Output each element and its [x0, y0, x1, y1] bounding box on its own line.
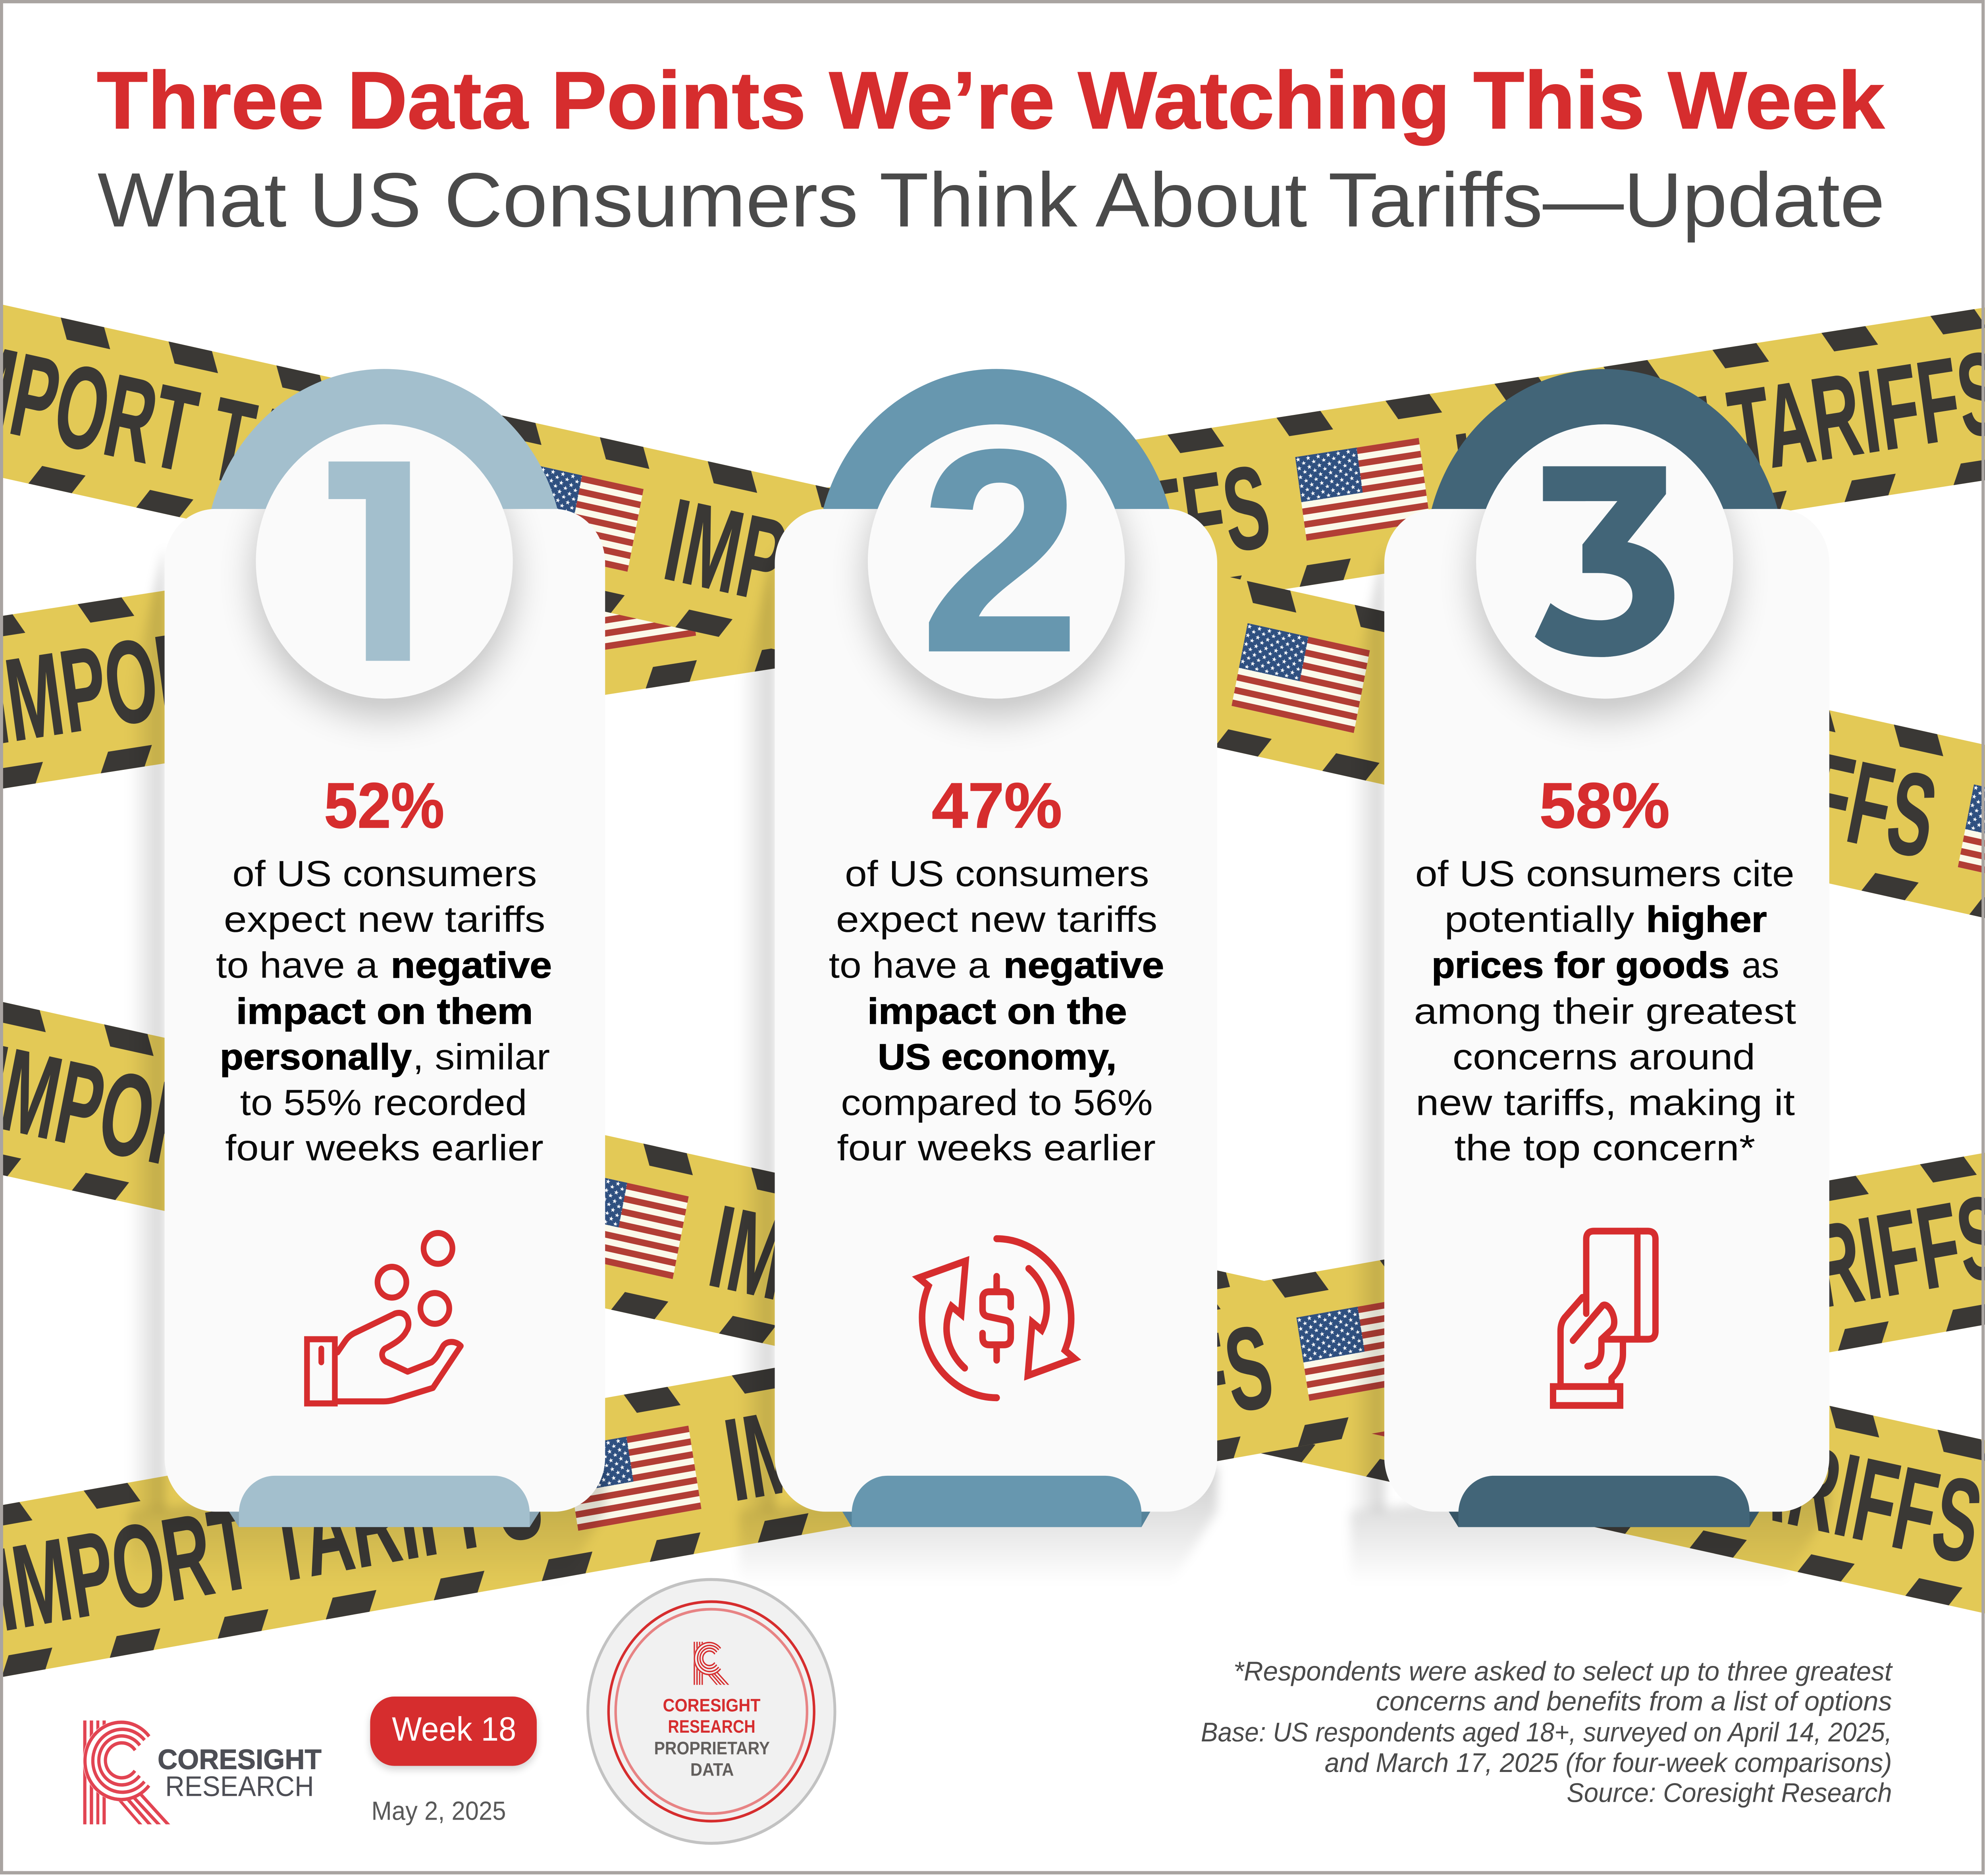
number circle shadow 3 [1474, 438, 1735, 716]
body text 1: four weeks earlier [225, 1128, 543, 1168]
number circle 2 [868, 424, 1125, 699]
arch 2 [817, 369, 1176, 595]
body text 2: compared to 56% [841, 1083, 1153, 1123]
body text 2: US economy, [878, 1037, 1116, 1078]
card body 1 [165, 509, 605, 1512]
panel: card 3 [1351, 369, 1829, 1584]
subtitle: What US Consumers Think About Tariffs—Update [98, 158, 1885, 244]
body text 3: the top concern* [1454, 1128, 1756, 1168]
body text 3: new tariffs, making it [1416, 1083, 1796, 1123]
icon: dollar with circular arrows [919, 1239, 1075, 1398]
body text 3: higher [1646, 899, 1767, 940]
body text 1: , similar [413, 1037, 550, 1078]
body text 2: to have a [829, 945, 991, 986]
footnote: Base: US respondents aged 18+, surveyed on April 14, 2025, [1201, 1718, 1892, 1748]
bottom tab 1 [239, 1476, 530, 1527]
body text 1: expect new tariffs [224, 899, 545, 940]
footnote: concerns and benefits from a list of options [1376, 1687, 1892, 1717]
body text 2: of US consumers [845, 854, 1149, 894]
seal logo mark [694, 1642, 729, 1685]
icon: hand holding card [1553, 1231, 1655, 1406]
numeral 2: 2 [920, 391, 1080, 711]
tape: rising lower tape: IMPORT TARIFFS [0, 1431, 550, 1656]
number circle 1 [256, 424, 513, 699]
number circle shadow 1 [254, 438, 515, 716]
body text 2: four weeks earlier [837, 1128, 1156, 1168]
panel: card 2 [739, 369, 1217, 1584]
stat 2: 47% [932, 771, 1062, 843]
logo: Coresight Research: RESEARCH [165, 1772, 314, 1803]
footnote: and March 17, 2025 (for four-week comparisons) [1325, 1749, 1892, 1779]
footnote: Source: Coresight Research [1567, 1779, 1892, 1809]
logo: Coresight Research [83, 1720, 322, 1824]
logo wordmark: CORESIGHT [158, 1745, 322, 1776]
bottom tab fold 3 [1448, 1511, 1760, 1527]
bottom tab 2 [852, 1476, 1141, 1527]
numeral 1: 1 [301, 400, 451, 723]
numeral 3: 3 [1525, 412, 1685, 711]
tape: rising lower tape [0, 1128, 1985, 1695]
tape: rising upper tape: IMPORT TARIFFS [0, 555, 543, 769]
number circle 3 [1476, 424, 1733, 699]
tape: rising lower tape: IMPORT TARIFFS [717, 1301, 1281, 1527]
tape: falling lower tape: IMPORT TARIFFS [0, 1020, 538, 1268]
tape: rising upper tape: IMPORT TARIFFS [714, 441, 1277, 656]
logo mark [83, 1720, 170, 1824]
seal text: DATA [690, 1760, 734, 1780]
tape: falling lower tape: IMPORT TARIFFS [700, 1181, 1264, 1429]
week badge: Week 18 [392, 1711, 516, 1749]
body text 1: negative [391, 945, 552, 986]
body text 3: potentially [1444, 899, 1635, 940]
footnote [1201, 1658, 1894, 1809]
seal text: CORESIGHT [663, 1695, 761, 1716]
seal text [654, 1695, 770, 1780]
bottom tab fold 2 [842, 1511, 1151, 1527]
body text 1: to 55% recorded [240, 1083, 527, 1123]
body text 2: negative [1004, 945, 1164, 986]
seal text: RESEARCH [668, 1716, 755, 1737]
footnote: *Respondents were asked to select up to three greatest [1233, 1658, 1894, 1687]
date: May 2, 2025 [372, 1797, 506, 1827]
title: Three Data Points We’re Watching This Week [97, 55, 1885, 146]
week badge [370, 1697, 537, 1769]
body text 3 [1414, 854, 1797, 1168]
panel: card 1 [129, 369, 605, 1584]
stat 3: 58% [1540, 771, 1670, 843]
seal text: PROPRIETARY [654, 1738, 770, 1758]
arch 1 [204, 369, 564, 595]
body text 3: concerns around [1453, 1037, 1755, 1078]
card body 2 [775, 509, 1217, 1512]
tape: rising upper tape [0, 285, 1985, 805]
body text 3: as [1742, 945, 1779, 986]
body text 1: personally [220, 1037, 412, 1078]
body text 1: impact on them [236, 991, 533, 1032]
body text 2 [829, 854, 1164, 1168]
tape: falling upper tape: IMPORT TARIFFS [655, 474, 1220, 723]
bottom tab fold 1 [229, 1511, 540, 1527]
card body 3 [1384, 509, 1829, 1512]
icon: hand with coins [307, 1233, 461, 1404]
body text 1 [216, 854, 552, 1168]
body text 3: of US consumers cite [1415, 854, 1794, 894]
body text 3: prices for goods [1432, 945, 1730, 986]
tape: falling upper tape [0, 277, 1985, 938]
body text 2: impact on the [867, 991, 1127, 1032]
tape: falling lower tape [0, 974, 1985, 1633]
body text 2: expect new tariffs [836, 899, 1157, 940]
body text 1: to have a [216, 945, 379, 986]
arch 3 [1425, 369, 1785, 595]
bottom tab 3 [1458, 1476, 1750, 1527]
proprietary data seal [588, 1579, 835, 1843]
stat 1: 52% [324, 771, 444, 843]
body text 1: of US consumers [232, 854, 537, 894]
body text 3: among their greatest [1414, 991, 1797, 1032]
number circle shadow 2 [866, 438, 1127, 716]
